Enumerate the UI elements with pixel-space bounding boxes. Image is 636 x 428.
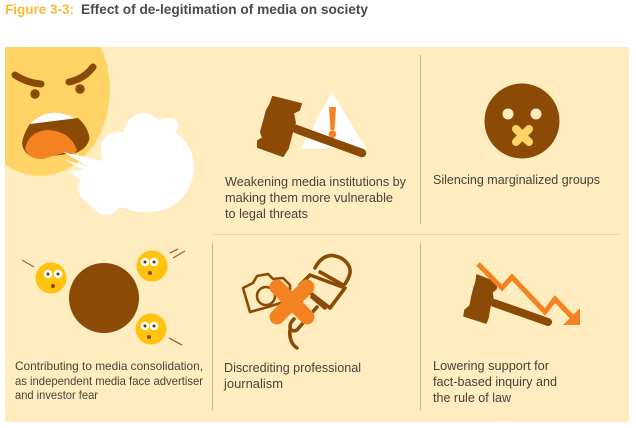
icon: gavel: [258, 97, 362, 156]
text: lowering: [433, 359, 557, 405]
text: weakening: Weakening media institutions by: [225, 175, 407, 189]
icon: warning triangle: [302, 93, 365, 148]
text: consolidation: [15, 359, 203, 402]
text: weakening: making them more vulnerable: [225, 191, 393, 205]
text: consolidation: Contributing to media consolidation,: [15, 359, 203, 373]
icon: angry shouting face: [5, 47, 110, 176]
text: consolidation: and investor fear: [15, 388, 98, 402]
text: consolidation: as independent media face advertiser: [15, 374, 203, 388]
text: discrediting: journalism: [223, 377, 283, 391]
panel: silencing marginalized groups: [433, 84, 600, 187]
text: discrediting: [223, 361, 361, 391]
title: Effect of de-legitimation of media on society: [81, 2, 368, 17]
icon: breath cloud: [63, 113, 194, 215]
text: weakening: [225, 175, 407, 221]
icon: large circle with worried faces: [22, 249, 185, 345]
panel: discrediting journalism: [223, 256, 361, 391]
icon: silenced face: [484, 84, 560, 158]
icon: crossed-out camera and microphone: [243, 256, 350, 348]
panel: media consolidation: [15, 249, 203, 402]
icon: gavel with falling arrow: [464, 264, 580, 325]
title: Figure 3-3:: [5, 2, 74, 17]
text: lowering: the rule of law: [433, 391, 512, 405]
text: lowering: fact-based inquiry and: [433, 375, 557, 389]
panel: weakening media institutions: [225, 93, 407, 221]
text: discrediting: Discrediting professional: [224, 361, 361, 375]
text: lowering: Lowering support for: [433, 359, 549, 373]
panel: lowering support: [433, 264, 580, 405]
text: silencing: Silencing marginalized groups: [433, 173, 600, 187]
text: weakening: to legal threats: [225, 207, 308, 221]
